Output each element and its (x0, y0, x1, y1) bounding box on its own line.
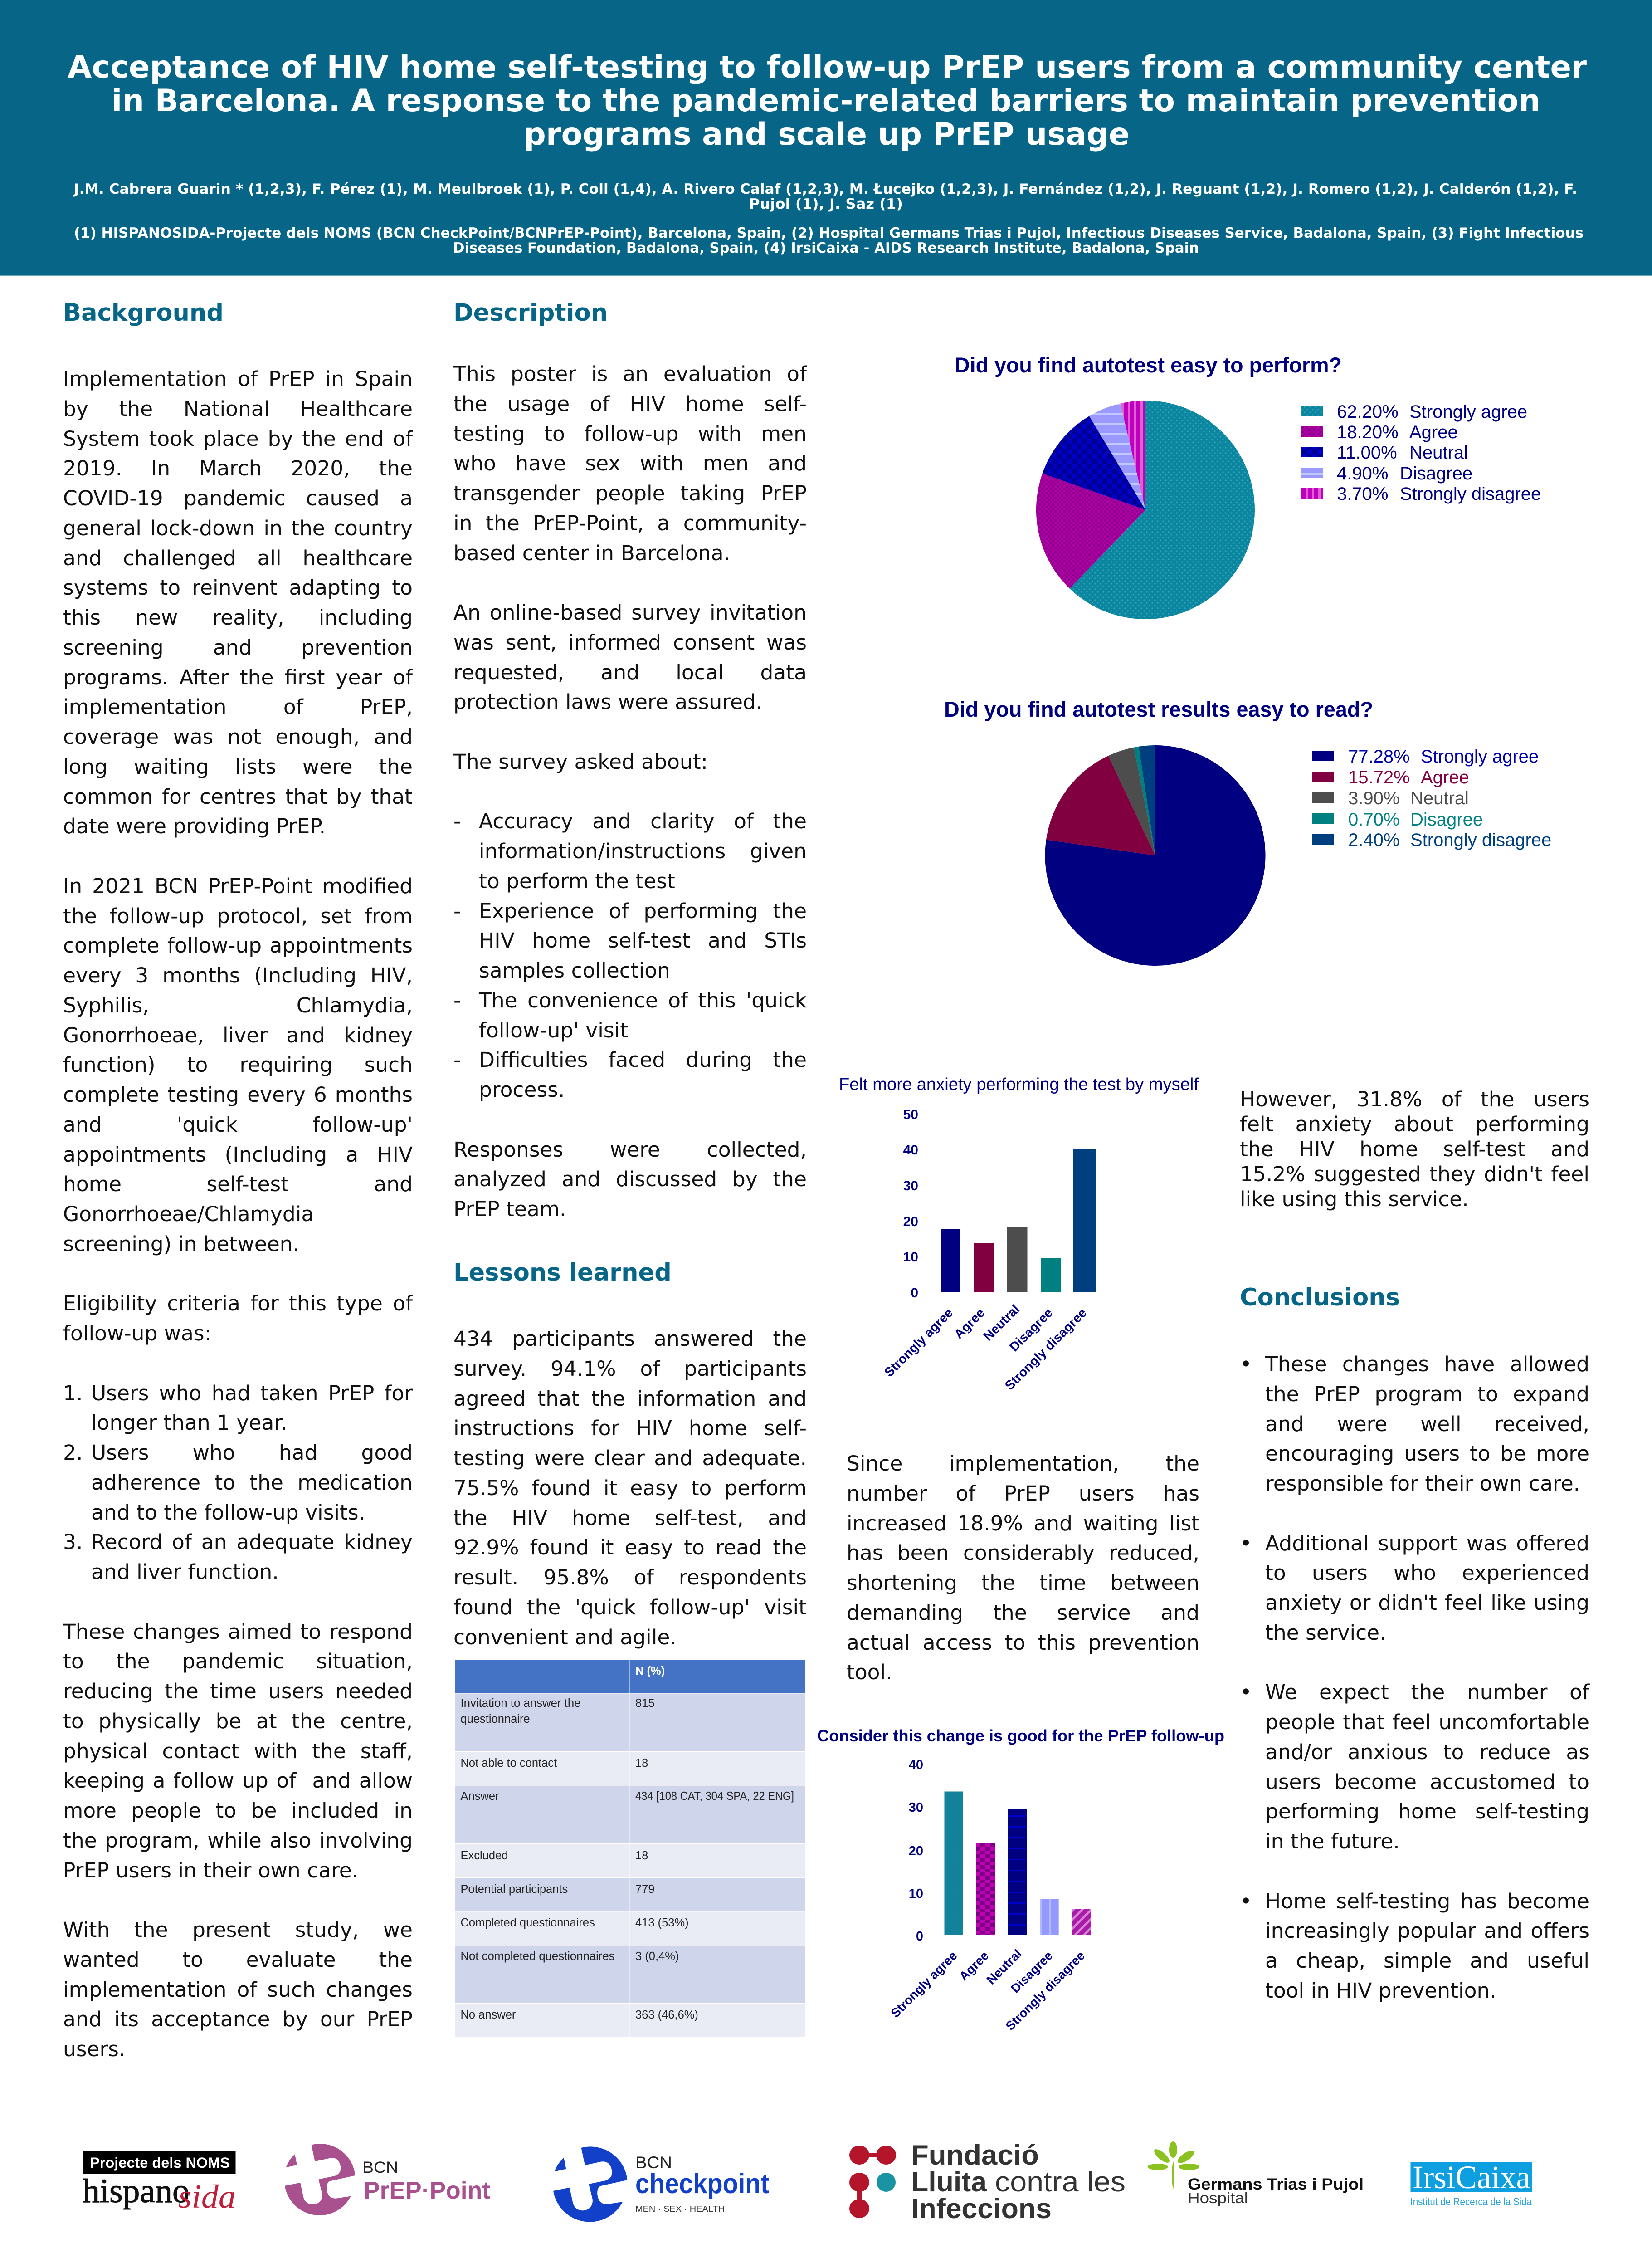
affiliations: (1) HISPANOSIDA-Projecte dels NOMS (BCN CheckPoint/BCNPrEP-Point), Barcelona, Spain, (2) Hospital Germans Trias i Pujol, Infectious Diseases Service, Badalona, Spain, (3) Fight Infectious (74, 225, 1584, 241)
text block: background: to physically be at the centre, (63, 1709, 413, 1733)
text block: conclusions: users become accustomed to (1265, 1770, 1589, 1794)
text block: background: In 2021 BCN PrEP-Point modified (63, 874, 413, 898)
table cell text: 779 (635, 1883, 655, 1896)
text block: anxiety note (1240, 1087, 1589, 1212)
bar chart: change is good (817, 1726, 1224, 2033)
text block: description: in the PrEP-Point, a community- (453, 511, 807, 535)
logo: BCN PrEP-Point: BCN (362, 2159, 398, 2176)
text block: since implementation: Since implementation, the (847, 1452, 1199, 1476)
text block: background: These changes aimed to respond (63, 1619, 413, 1644)
text block: since implementation: number of PrEP users has (847, 1481, 1199, 1505)
text block: background: Gonorrhoeae, liver and kidney (63, 1023, 413, 1047)
logo: Fundació Lluita contra les Infeccions (849, 2140, 1126, 2224)
text block: conclusions (1240, 1349, 1589, 2006)
text block: conclusions: responsible for their own care. (1265, 1471, 1580, 1496)
logo: BCN checkpoint (553, 2146, 769, 2222)
text block: conclusions: We expect the number of (1265, 1680, 1589, 1704)
text block: description: to perform the test (479, 869, 675, 893)
x axis labels: Strongly disagree (1002, 1305, 1090, 1393)
text block: conclusions: the service. (1265, 1621, 1386, 1645)
logo: BCN PrEP-Point (285, 2144, 490, 2215)
text block: background: systems to reinvent adapting to (63, 576, 413, 600)
text block: description: HIV home self-test and STIs (479, 929, 807, 953)
heading: Conclusions: Conclusions (1240, 1284, 1400, 1311)
y axis labels (903, 1107, 918, 1300)
text block: background: and its acceptance by our PrEP (63, 2007, 413, 2031)
x axis labels: Strongly agree (882, 1305, 956, 1380)
text block: conclusions: anxiety or didn't feel like using (1265, 1591, 1589, 1615)
y axis labels: 20 (903, 1214, 918, 1229)
legend: 2.40% (1348, 830, 1399, 850)
text block: lessons learned: agreed that the information and (453, 1386, 807, 1411)
text block: anxiety note: felt anxiety about performing (1240, 1112, 1589, 1136)
chart title: Consider this change is good for the PrEP follow-up (817, 1726, 1224, 1745)
text block: description: - (453, 809, 461, 833)
text block: conclusions: to users who experienced (1265, 1561, 1589, 1585)
y axis labels: 10 (909, 1887, 923, 1901)
table cell text: Invitation to answer the (461, 1697, 580, 1710)
icon: green sprout (1147, 2141, 1199, 2190)
logo: Fundació Lluita contra les Infeccions: Infeccions (911, 2193, 1052, 2224)
table cell text: 434 [108 CAT, 304 SPA, 22 ENG] (635, 1790, 794, 1803)
text block: background: 2019. In March 2020, the (63, 456, 413, 480)
text block: background: long waiting lists were the (63, 755, 413, 779)
legend: 18.20% (1337, 422, 1399, 442)
logo: Fundació Lluita contra les Infeccions: contra les (995, 2166, 1126, 2198)
legend: Neutral (1409, 443, 1468, 463)
text block: background: wanted to evaluate the (63, 1948, 413, 1972)
table cell text: questionnaire (461, 1713, 530, 1725)
logo: Germans Trias i Pujol Hospital (1147, 2141, 1364, 2206)
authors: Pujol (1), J. Saz (1) (749, 196, 903, 212)
logo: Projecte dels NOMS hispanosida: sida (178, 2178, 236, 2215)
text block: since implementation: demanding the service and (847, 1601, 1199, 1625)
legend: Neutral (1410, 788, 1469, 808)
logo: BCN checkpoint: BCN (635, 2153, 672, 2172)
legend (1301, 402, 1541, 504)
text block: background: appointments (Including a HIV (63, 1142, 413, 1167)
x axis labels: Disagree (1008, 1948, 1055, 1996)
text block: lessons learned: the HIV home self-test, and (453, 1506, 807, 1530)
logo: Projecte dels NOMS hispanosida (83, 2151, 236, 2215)
text block: description: testing to follow-up with men (453, 422, 807, 445)
text block: lessons learned: 92.9% found it easy to read the (453, 1535, 807, 1559)
authors (73, 181, 1577, 212)
text block: lessons learned: 75.5% found it easy to perform (453, 1476, 807, 1500)
text block: background: COVID-19 pandemic caused a (63, 486, 413, 510)
text block: description: follow-up' visit (479, 1018, 628, 1042)
text block: background: users. (63, 2037, 125, 2061)
text block: lessons learned: testing were clear and adequate. (453, 1446, 807, 1470)
text block: background: and liver function. (91, 1560, 279, 1584)
icon: checkpoint mark (553, 2146, 627, 2222)
logo: IrsiCaixa: IrsiCaixa (1413, 2159, 1530, 2195)
logo: Projecte dels NOMS hispanosida: hispano (83, 2172, 190, 2210)
text block: background: physical contact with the staff, (63, 1739, 413, 1763)
text block: conclusions: These changes have allowed (1265, 1352, 1589, 1376)
y axis labels: 40 (909, 1758, 923, 1772)
text block: background: the program, while also involving (63, 1828, 413, 1853)
text block: description: Experience of performing the (479, 899, 807, 923)
legend: Agree (1409, 422, 1458, 442)
text block: background: 1. (63, 1381, 83, 1405)
y axis labels: 0 (911, 1286, 918, 1300)
text block: background: follow-up was: (63, 1321, 211, 1345)
heading: Background: Background (63, 299, 224, 327)
table cell text: Excluded (461, 1849, 508, 1862)
legend: Strongly disagree (1400, 484, 1541, 504)
table cell text: 815 (635, 1697, 655, 1710)
table cell text: 363 (46,6%) (635, 2009, 698, 2021)
text block: background: home self-test and (63, 1172, 413, 1196)
text block: background: keeping a follow up of and allow (63, 1769, 413, 1793)
logo: Germans Trias i Pujol Hospital: Hospital (1188, 2190, 1248, 2206)
legend: Disagree (1400, 464, 1472, 484)
title: programs and scale up PrEP usage (524, 117, 1130, 152)
y axis labels: 20 (909, 1844, 923, 1858)
affiliations (74, 225, 1584, 256)
text block: description: samples collection (479, 958, 670, 982)
text block: background: adherence to the medication (91, 1471, 413, 1495)
text block: description: Responses were collected, (453, 1138, 807, 1161)
logo: Germans Trias i Pujol Hospital: Germans Trias i Pujol (1188, 2175, 1364, 2193)
text block: anxiety note: However, 31.8% of the users (1240, 1087, 1589, 1111)
legend: Strongly agree (1409, 402, 1527, 422)
text block: description: The convenience of this 'quick (479, 988, 807, 1012)
text block: conclusions: Home self-testing has become (1265, 1889, 1589, 1913)
y axis labels: 30 (909, 1800, 923, 1815)
text block: background: Implementation of PrEP in Spain (63, 367, 413, 391)
text block: background: reducing the time users needed (63, 1679, 413, 1703)
legend (1312, 747, 1551, 850)
text block: background: Users who had good (91, 1441, 413, 1465)
text block: description: requested, and local data (453, 660, 807, 684)
text block: conclusions: • (1240, 1352, 1252, 1376)
text block: background: programs. After the first year of (63, 665, 413, 689)
text block: background: by the National Healthcare (63, 397, 413, 421)
bar chart: felt more anxiety (839, 1075, 1199, 1393)
table cell text: Answer (461, 1790, 499, 1803)
text block: lessons learned (453, 1324, 807, 1652)
heading: Description: Description (453, 299, 608, 327)
pie chart: easy to read (944, 697, 1551, 966)
text block: background: 2. (63, 1441, 83, 1465)
text block: since implementation: actual access to this prevention (847, 1630, 1199, 1655)
table cell text: 18 (635, 1757, 648, 1769)
table cell text: Not completed questionnaires (461, 1950, 615, 1963)
text block: background: general lock-down in the country (63, 516, 413, 540)
text block: background: Syphilis, Chlamydia, (63, 993, 413, 1017)
text block: lessons learned: convenient and agile. (453, 1625, 677, 1649)
text block: conclusions: Additional support was offered (1265, 1531, 1589, 1555)
text block: background: Users who had taken PrEP for (91, 1381, 413, 1405)
legend: 11.00% (1337, 443, 1397, 463)
y axis labels: 0 (916, 1929, 923, 1944)
text block: conclusions: increasingly popular and offers (1265, 1919, 1589, 1943)
text block: background: complete testing every 6 months (63, 1083, 413, 1107)
text block: conclusions: the PrEP program to expand (1265, 1382, 1589, 1406)
text block: since implementation (847, 1449, 1199, 1687)
x axis labels: Agree (951, 1305, 988, 1342)
text block: description: analyzed and discussed by the (453, 1167, 807, 1191)
text block: background: every 3 months (Including HIV, (63, 963, 413, 987)
text block: background: common for centres that by that (63, 785, 413, 808)
x axis labels (888, 1946, 1087, 2033)
logo: BCN checkpoint: MEN · SEX · HEALTH (635, 2204, 725, 2214)
affiliations: Diseases Foundation, Badalona, Spain, (4) IrsiCaixa - AIDS Research Institute, Badalona, Spain (453, 240, 1199, 256)
text block: background: Gonorrhoeae/Chlamydia (63, 1202, 314, 1226)
legend: 3.90% (1348, 788, 1399, 808)
text block: background: date were providing PrEP. (63, 814, 326, 838)
text block: lessons learned: result. 95.8% of respondents (453, 1565, 807, 1589)
table header text: N (%) (635, 1665, 665, 1677)
text block: background: System took place by the end of (63, 426, 413, 451)
text block: conclusions: people that feel uncomfortable (1265, 1710, 1589, 1734)
table: participation numbers (455, 1660, 805, 2037)
bars (941, 1149, 1096, 1292)
y axis labels: 40 (903, 1143, 918, 1158)
table rows (455, 1660, 805, 2037)
x axis labels: Neutral (981, 1302, 1023, 1344)
text block: description: transgender people taking PrEP (453, 481, 807, 505)
table cell text: Completed questionnaires (461, 1916, 595, 1929)
bars (944, 1792, 1091, 1935)
text block: conclusions: • (1240, 1531, 1252, 1555)
text block: background: to the pandemic situation, (63, 1649, 413, 1673)
text block: background: Record of an adequate kidney (91, 1530, 413, 1554)
table cell text: 3 (0,4%) (635, 1950, 679, 1963)
text block: conclusions: and/or anxious to reduce as (1265, 1740, 1589, 1764)
text block: anxiety note: 15.2% suggested they didn't feel (1240, 1162, 1589, 1186)
text block: background (63, 364, 413, 2064)
text block: description: process. (479, 1078, 565, 1102)
x axis labels: Neutral (984, 1946, 1024, 1987)
text block: background: screening) in between. (63, 1232, 299, 1256)
chart title: Did you find autotest results easy to read? (944, 697, 1373, 721)
text block: since implementation: shortening the time between (847, 1571, 1199, 1595)
logo: IrsiCaixa: Institut de Recerca de la Sida (1410, 2196, 1532, 2208)
text block: conclusions: a cheap, simple and useful (1265, 1949, 1589, 1973)
text block: description: - (453, 1048, 461, 1072)
text block: anxiety note: like using this service. (1240, 1187, 1469, 1211)
table cell text: No answer (461, 2009, 516, 2021)
legend: Agree (1421, 767, 1469, 787)
text block: background: and to the follow-up visits. (91, 1501, 365, 1524)
text block: background: and challenged all healthcare (63, 546, 413, 570)
text block: description: This poster is an evaluation of (453, 362, 807, 386)
heading: Lessons learned: Lessons learned (453, 1259, 672, 1286)
text block: background: implementation of PrEP, (63, 695, 413, 719)
text block: lessons learned: survey. 94.1% of participants (453, 1357, 807, 1381)
legend: 15.72% (1348, 767, 1410, 787)
text block: lessons learned: instructions for HIV home self- (453, 1416, 807, 1440)
logo: Projecte dels NOMS hispanosida: Projecte dels NOMS (90, 2155, 230, 2171)
text block: description: - (453, 988, 461, 1012)
text block: description: who have sex with men and (453, 451, 807, 475)
text block: background: PrEP users in their own care. (63, 1858, 358, 1882)
y axis labels: 10 (903, 1250, 918, 1265)
logo: Fundació Lluita contra les Infeccions: Lluita (911, 2166, 987, 2198)
text block: conclusions: encouraging users to be more (1265, 1442, 1589, 1466)
y axis labels: 50 (903, 1107, 918, 1122)
text block: lessons learned: 434 participants answered the (453, 1327, 807, 1351)
table cell text: Not able to contact (461, 1757, 557, 1769)
text block: background: implementation of such changes (63, 1978, 413, 2001)
legend: 3.70% (1337, 484, 1388, 504)
legend: Disagree (1410, 810, 1483, 830)
chart title: Felt more anxiety performing the test by myself (839, 1075, 1199, 1094)
title: in Barcelona. A response to the pandemic-related barriers to maintain prevention (112, 83, 1540, 119)
y axis labels (909, 1758, 923, 1944)
legend: 62.20% (1337, 402, 1399, 422)
x axis labels: Strongly agree (888, 1948, 960, 2020)
text block: description (453, 359, 807, 1224)
x axis labels: Disagree (1007, 1305, 1056, 1354)
text block: description: - (453, 899, 461, 923)
text block: description: Accuracy and clarity of the (479, 809, 807, 833)
text block: background: this new reality, including (63, 606, 413, 630)
authors: J.M. Cabrera Guarin * (1,2,3), F. Pérez (1), M. Meulbroek (1), P. Coll (1,4), A. Rivero Calaf (1,2,3), M. Łucejko (1,2,3), J. Fernández (1,2), J. Reguant (1,2), J. Romero (1,2), J. Calderón (1,2), F. (73, 181, 1577, 197)
x axis labels (882, 1302, 1090, 1393)
text block: description: was sent, informed consent was (453, 631, 807, 655)
text block: conclusions: • (1240, 1680, 1252, 1704)
text block: conclusions: and were well received, (1265, 1412, 1589, 1436)
text block: conclusions: • (1240, 1889, 1252, 1913)
text block: description: based center in Barcelona. (453, 541, 730, 565)
text block: conclusions: in the future. (1265, 1829, 1400, 1853)
text block: description: PrEP team. (453, 1197, 566, 1221)
text block: background: complete follow-up appointments (63, 934, 413, 958)
text block: description: protection laws were assured. (453, 690, 762, 714)
text block: background: 3. (63, 1530, 83, 1554)
text block: since implementation: increased 18.9% and waiting list (847, 1511, 1199, 1535)
text block: description: the usage of HIV home self- (453, 392, 807, 416)
pie slices (1036, 401, 1255, 619)
chart title: Did you find autotest easy to perform? (955, 353, 1342, 377)
legend: Strongly disagree (1410, 830, 1551, 850)
text block: description: Difficulties faced during the (479, 1048, 807, 1072)
title: Acceptance of HIV home self-testing to follow-up PrEP users from a community center (68, 49, 1587, 85)
text block: background: and 'quick follow-up' (63, 1113, 413, 1137)
table cell text: Potential participants (461, 1883, 568, 1896)
text block: lessons learned: found the 'quick follow-up' visit (453, 1595, 807, 1619)
text block: background: longer than 1 year. (91, 1411, 287, 1435)
icon: PrEP-Point mark (285, 2144, 355, 2215)
table cell text: 413 (53%) (635, 1916, 689, 1929)
y axis labels: 30 (903, 1178, 918, 1193)
text block: conclusions: performing home self-testing (1265, 1799, 1589, 1823)
table cell text (461, 1697, 794, 2021)
text block: since implementation: tool. (847, 1660, 892, 1684)
text block: since implementation: has been considerably reduced, (847, 1541, 1199, 1565)
header banner (0, 0, 1652, 276)
legend: Strongly agree (1421, 747, 1539, 767)
legend: 4.90% (1337, 464, 1388, 484)
text block: background: the follow-up protocol, set from (63, 904, 413, 928)
logo: Fundació Lluita contra les Infeccions: Fundació (911, 2140, 1039, 2171)
x axis labels: Strongly disagree (1003, 1948, 1087, 2033)
title (68, 49, 1587, 152)
pie slices (1045, 745, 1266, 966)
text block: background: screening and prevention (63, 635, 413, 660)
text block: description: The survey asked about: (453, 750, 708, 774)
logo: BCN checkpoint: checkpoint (635, 2168, 769, 2200)
x axis labels: Agree (956, 1948, 991, 1984)
text block: background: function) to requiring such (63, 1053, 413, 1077)
pie chart: easy to perform (955, 353, 1541, 619)
text block: background: Eligibility criteria for this type of (63, 1291, 413, 1315)
text block: description: An online-based survey invitation (453, 601, 807, 625)
legend: 0.70% (1348, 810, 1399, 830)
text block: anxiety note: the HIV home self-test and (1240, 1137, 1589, 1161)
text block: description: information/instructions given (479, 839, 807, 863)
text block: background: With the present study, we (63, 1918, 413, 1942)
text block: conclusions: tool in HIV prevention. (1265, 1979, 1496, 2003)
logo: BCN PrEP-Point: PrEP·Point (364, 2177, 490, 2204)
table cell text: 18 (635, 1849, 648, 1862)
text block: background: more people to be included in (63, 1799, 413, 1823)
text block: background: coverage was not enough, and (63, 725, 413, 749)
legend: 77.28% (1348, 747, 1410, 767)
